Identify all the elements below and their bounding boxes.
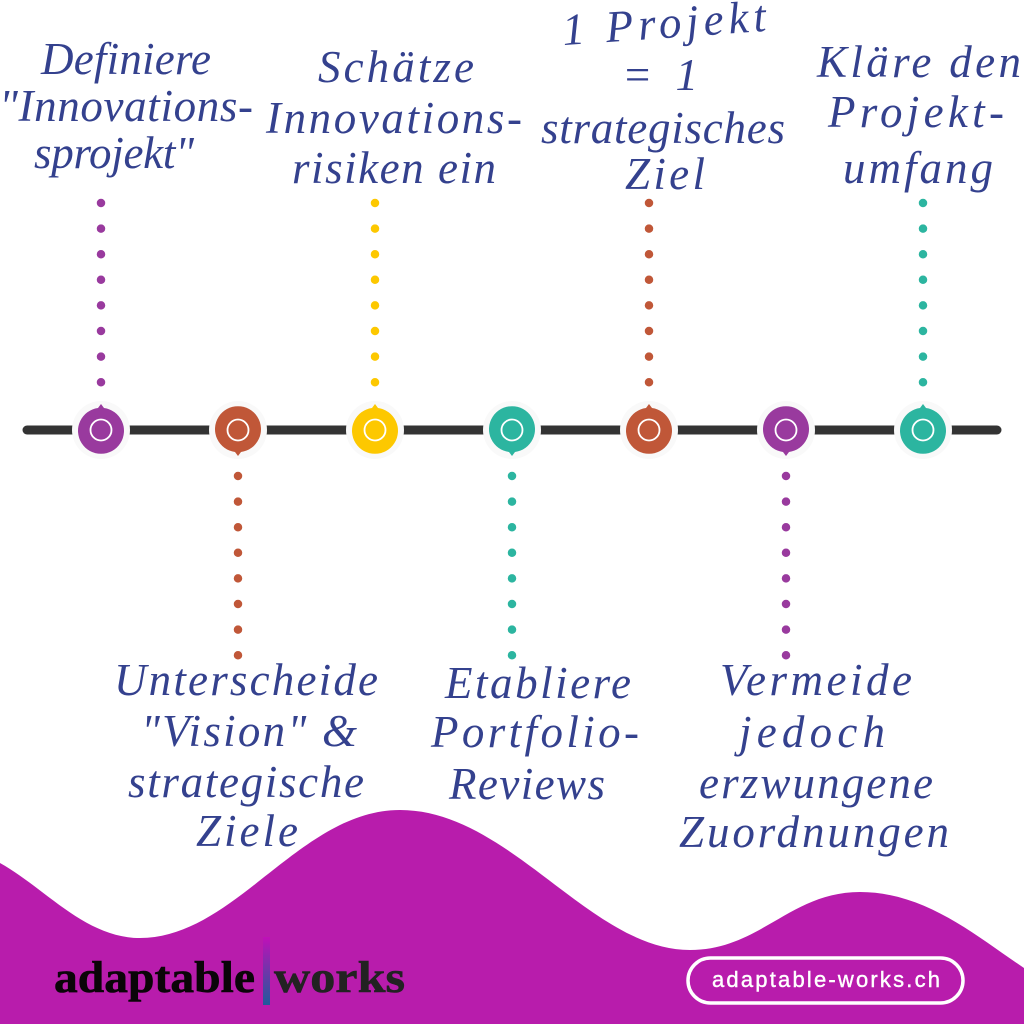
text: Schätze Innovationsrisiken ein bbox=[265, 42, 522, 193]
text: 1 Projekt = 1 strategisches Ziel: Ziel bbox=[625, 149, 705, 199]
text: Kläre den Projektumfang: Kläre den bbox=[816, 37, 1021, 87]
text: Etabliere Portfolio-Reviews bbox=[430, 658, 639, 809]
wave background bbox=[0, 810, 1024, 1024]
logo: adaptable works: adaptable bbox=[54, 953, 255, 1002]
text: Vermeide jedoch erzwungene Zuordnungen: erzwungene bbox=[699, 758, 933, 808]
text: Vermeide jedoch erzwungene Zuordnungen: Zuordnungen bbox=[679, 807, 949, 857]
text: Definiere Innovationsprojekt bbox=[0, 34, 253, 178]
text: 1 Projekt = 1 strategisches Ziel: = 1 bbox=[622, 50, 698, 100]
step 4: teal marker and dotted line bbox=[483, 401, 541, 657]
text: Definiere Innovationsprojekt: Definiere bbox=[40, 34, 211, 84]
step 1: purple marker and dotted line bbox=[72, 203, 130, 459]
text: Unterscheide Vision und strategische Ziele: Ziele bbox=[196, 806, 298, 856]
text: Definiere Innovationsprojekt: sprojekt" bbox=[34, 128, 195, 178]
text: Vermeide jedoch erzwungene Zuordnungen bbox=[679, 655, 949, 857]
text: Definiere Innovationsprojekt: "Innovations- bbox=[0, 81, 253, 131]
text: 1 Projekt = 1 strategisches Ziel bbox=[541, 0, 785, 199]
text: Schätze Innovationsrisiken ein: risiken ein bbox=[292, 143, 496, 193]
website button bbox=[688, 958, 963, 1003]
logo: adaptable works: works bbox=[274, 953, 405, 1002]
text: Unterscheide Vision und strategische Ziele: "Vision" & bbox=[141, 706, 357, 756]
text: Unterscheide Vision und strategische Ziele: Unterscheide bbox=[114, 655, 378, 705]
text: Unterscheide Vision und strategische Ziele: strategische bbox=[128, 757, 364, 807]
step 6: purple marker and dotted line bbox=[757, 401, 815, 657]
text: Schätze Innovationsrisiken ein: Schätze bbox=[318, 42, 474, 92]
logo: adaptable works bbox=[54, 937, 405, 1005]
text: Schätze Innovationsrisiken ein: Innovations- bbox=[265, 93, 522, 143]
text: 1 Projekt = 1 strategisches Ziel: strategisches bbox=[541, 103, 785, 153]
timeline axis bbox=[27, 426, 997, 434]
text: Etabliere Portfolio-Reviews: Etabliere bbox=[444, 658, 631, 708]
text: Kläre den Projektumfang: Projekt- bbox=[827, 87, 1004, 137]
text: Etabliere Portfolio-Reviews: Portfolio- bbox=[430, 707, 639, 757]
step 7: teal marker and dotted line bbox=[894, 203, 952, 459]
website button: adaptable-works.ch bbox=[712, 967, 940, 992]
text: Kläre den Projektumfang bbox=[816, 37, 1021, 193]
text: Vermeide jedoch erzwungene Zuordnungen: jedoch bbox=[734, 707, 885, 757]
step 3: yellow marker and dotted line bbox=[346, 203, 404, 459]
step 5: rust marker and dotted line bbox=[620, 203, 678, 459]
text: Kläre den Projektumfang: umfang bbox=[843, 143, 993, 193]
step 2: rust marker and dotted line bbox=[209, 401, 267, 657]
text: Unterscheide Vision und strategische Ziele bbox=[114, 655, 378, 856]
text: Etabliere Portfolio-Reviews: Reviews bbox=[448, 759, 605, 809]
text: Vermeide jedoch erzwungene Zuordnungen: Vermeide bbox=[720, 655, 912, 705]
